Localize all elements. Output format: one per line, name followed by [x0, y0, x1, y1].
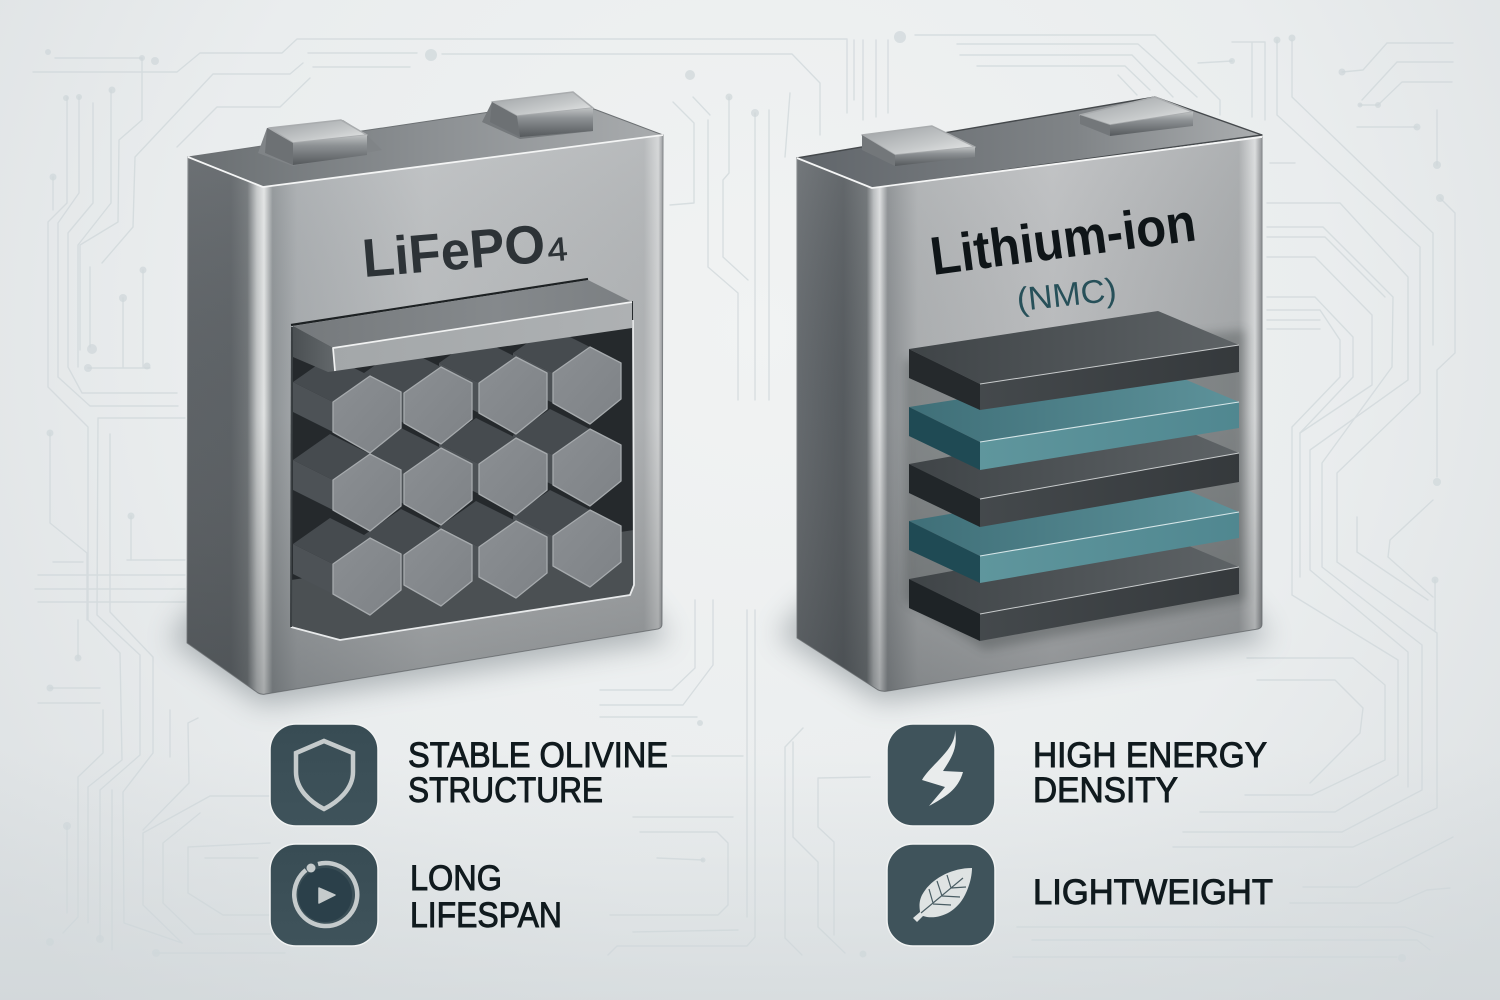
icon: shield: [270, 724, 378, 826]
text: high energy density: DENSITY: [1033, 771, 1178, 810]
layer 1: dark: [909, 311, 1239, 410]
text: stable olivine structure: STRUCTURE: [408, 771, 603, 810]
text: long lifespan: LONG: [410, 859, 502, 898]
cutaway: hexagonal olivine cells: [291, 301, 634, 640]
layer 5: dark: [909, 533, 1239, 641]
layer 2: teal: [909, 368, 1239, 470]
battery: Lithium-ion NMC: [778, 97, 1270, 702]
layered NMC stack: [909, 311, 1239, 641]
label: NMC: (NMC): [1015, 271, 1118, 318]
battery top face: [188, 100, 663, 187]
text: lightweight: LIGHTWEIGHT: [1033, 873, 1273, 912]
battery casing: [797, 137, 1262, 691]
text: stable olivine structure: [408, 736, 668, 810]
feature: stable olivine structure: [270, 724, 668, 826]
battery top face: [797, 97, 1262, 188]
label: LiFePO4: 4: [546, 230, 569, 268]
label: Lithium-ion: Lithium-ion: [927, 193, 1199, 287]
feature: long lifespan: [270, 844, 562, 946]
text: long lifespan: LIFESPAN: [410, 896, 562, 935]
top bar: [291, 279, 632, 372]
terminal: right: [482, 92, 593, 139]
icon: lightning bolt: [887, 724, 995, 826]
terminal: left: [258, 120, 382, 166]
text: high energy density: HIGH ENERGY: [1033, 736, 1267, 775]
terminal: right: [1080, 97, 1193, 136]
text: stable olivine structure: STABLE OLIVINE: [408, 736, 668, 775]
shadow behind layer stack: [905, 330, 1245, 650]
text: long lifespan: [410, 859, 562, 935]
battery: LiFePO4: [170, 92, 670, 705]
layer 3: dark: [909, 419, 1239, 527]
label: LiFePO4: LiFePO: [360, 214, 547, 289]
icon: leaf: [887, 844, 995, 946]
feature: high energy density: [887, 724, 1267, 826]
battery casing: [187, 135, 663, 694]
icon: cycle with play: [270, 844, 378, 946]
feature: lightweight: [887, 844, 1273, 946]
terminal: left: [862, 126, 975, 166]
layer 4: teal: [909, 478, 1239, 583]
text: high energy density: [1033, 736, 1267, 810]
